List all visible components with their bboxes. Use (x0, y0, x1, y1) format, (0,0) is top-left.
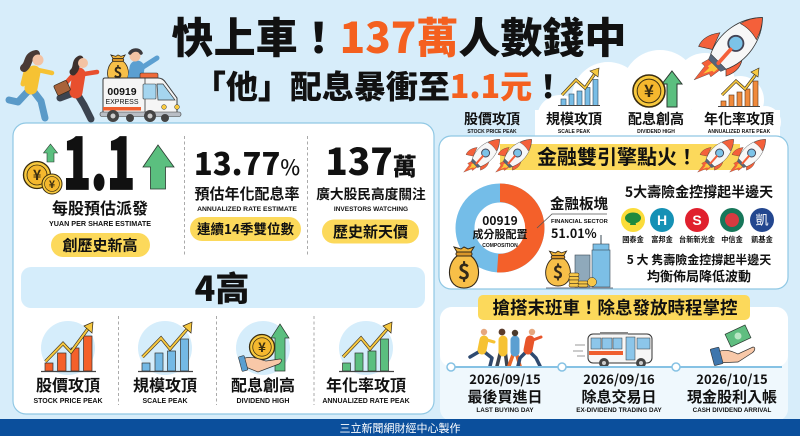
caption english: YUAN PER SHARE ESTIMATE (49, 219, 151, 228)
label english: SCALE PEAK (142, 398, 188, 405)
step: last buying day: 最後買進日 (467, 386, 543, 407)
pill: 創歷史新高 (62, 234, 138, 256)
label: annualized rate peak: 年化率攻頂 (704, 109, 774, 129)
icon: big arrow (143, 145, 174, 189)
logo: Fubon: H (657, 212, 667, 228)
title (172, 5, 626, 108)
icon: small arrow (44, 144, 58, 162)
caption: 預估年化配息率 (194, 183, 300, 204)
caption: 廣大股民高度關注 (316, 183, 426, 203)
label english: ANNUALIZED RATE PEAK (322, 398, 410, 405)
financial sector callout: FINANCIAL SECTOR (551, 219, 609, 225)
van: EXPRESS (105, 99, 139, 106)
van (100, 73, 181, 122)
step: last buying day: 2026/09/15 (469, 369, 541, 388)
logos row (621, 208, 774, 245)
step: ex-dividend trading day: EX-DIVIDEND TRADING DAY (576, 407, 663, 414)
step: last buying day (467, 369, 543, 414)
donut centre label: 00919 (482, 212, 518, 229)
heading: five insurers: 5大壽險金控撐起半邊天 (625, 182, 773, 202)
label: stock price peak: 股價攻頂 (464, 109, 520, 129)
step: cash dividend arrival: CASH DIVIDEND ARRIVAL (693, 407, 772, 414)
panel: financial sector (439, 136, 788, 289)
label: 年化率攻頂 (326, 372, 406, 396)
metric: yuan per share (24, 109, 174, 257)
value 1.1: 1.1 (63, 109, 135, 210)
pill (51, 233, 150, 257)
step: ex-dividend trading day: 2026/09/16 (583, 369, 655, 388)
runner two (53, 58, 97, 119)
financial sector callout: 金融板塊 (550, 193, 608, 214)
donut centre label (472, 212, 528, 249)
logo: KGI: 凱基金 (751, 235, 774, 245)
passenger pointing (130, 50, 157, 80)
van label: 00919 (107, 86, 137, 98)
panel: key figures and four highs (13, 109, 434, 414)
label english: DIVIDEND HIGH (237, 398, 289, 405)
icon: large rocket (694, 18, 762, 80)
step: ex-dividend trading day: 除息交易日 (581, 386, 657, 407)
icons: small rockets (464, 139, 766, 172)
heading band: 4高 (21, 262, 425, 311)
logo: KGI (750, 208, 774, 245)
runner one (9, 54, 52, 118)
label: dividend high: 配息創高 (628, 109, 684, 129)
financial sector callout (537, 193, 609, 242)
text: balance line: 均衡佈局降低波動 (647, 266, 751, 285)
title line 2: 「他」配息暴衝至1.1元！ (194, 62, 564, 108)
heading band: 4高: 4高 (195, 262, 249, 311)
icon: blue chart (558, 68, 600, 106)
label: dividend high: DIVIDEND HIGH (637, 129, 675, 135)
pill: 歷史新天價 (333, 221, 408, 242)
icon: orange chart (718, 68, 760, 106)
label: 配息創高 (231, 372, 295, 396)
footer bar (0, 419, 800, 436)
step: cash dividend arrival: 現金股利入帳 (687, 386, 777, 407)
step: cash dividend arrival (687, 369, 777, 414)
financial sector callout: 51.01% (551, 223, 597, 242)
caption english: INVESTORS WATCHING (334, 206, 408, 213)
title line 1: 快上車！137萬人數錢中 (172, 5, 626, 66)
value 13.77%: 13.77% (194, 139, 300, 184)
metric: investors (316, 132, 426, 244)
label: 股價攻頂 (36, 372, 100, 396)
label: scale peak: SCALE PEAK (558, 129, 590, 135)
icon: bus (573, 332, 652, 368)
logo: CTBC: 中信金 (721, 235, 744, 245)
logo: Cathay: 國泰金 (622, 235, 645, 245)
money bag on van (108, 55, 128, 84)
item: annualized rate peak (322, 321, 410, 405)
donut chart: composition (465, 184, 544, 272)
icon: hand with cash (710, 325, 755, 366)
label: scale peak: 規模攻頂 (546, 109, 602, 129)
logo: Taishin Shin Kong (679, 208, 716, 245)
label: stock price peak: STOCK PRICE PEAK (467, 129, 517, 135)
step: ex-dividend trading day (576, 369, 663, 414)
donut centre label: 成分股配置 (472, 226, 528, 242)
illustration: runners and express van (9, 50, 181, 122)
heading banner (500, 141, 740, 170)
label english: STOCK PRICE PEAK (33, 398, 103, 405)
heading banner: 金融雙引擎點火！ (537, 141, 697, 170)
logo: Taishin Shin Kong: S (692, 212, 702, 228)
step: last buying day: LAST BUYING DAY (476, 407, 534, 414)
item: dividend high (231, 321, 295, 405)
peak labels row (464, 68, 774, 135)
label: annualized rate peak: ANNUALIZED RATE PEAK (708, 129, 771, 135)
logo: CTBC (720, 208, 744, 245)
icon: coin and green arrow (633, 71, 682, 107)
icon: money bag left (449, 247, 479, 288)
donut centre label: COMPOSITION (482, 243, 518, 249)
logo: Fubon: 富邦金 (651, 235, 674, 245)
footer bar: 三立新聞網財經中心製作 (340, 420, 460, 436)
item: scale peak (133, 321, 197, 405)
caption: 每股預估派發 (52, 195, 148, 219)
metric: annualized rate (190, 139, 301, 241)
label: 規模攻頂 (133, 372, 197, 396)
value 137萬: 137萬 (325, 132, 417, 186)
cloud behind top-right labels (535, 50, 781, 145)
logo: Cathay (621, 208, 645, 245)
logo: Taishin Shin Kong: 台新新光金 (679, 235, 716, 245)
logo: Fubon (650, 208, 674, 245)
text: insurers line: 5 大 隽壽險金控撐起半邊天 (627, 251, 771, 268)
pill: 連續14季雙位數 (197, 218, 294, 238)
panel: timeline (440, 295, 788, 421)
item: stock price peak (33, 321, 103, 405)
icon: coins (24, 162, 62, 194)
timeline line and dots (447, 363, 782, 371)
logo: KGI: 凱 (755, 210, 769, 228)
heading banner: 搶搭末班車！除息發放時程掌控 (492, 295, 738, 320)
icon: running crowd (470, 329, 541, 366)
step: cash dividend arrival: 2026/10/15 (696, 369, 768, 388)
icon: bag, coins and buildings (546, 235, 613, 288)
caption english: ANNUALIZED RATE ESTIMATE (197, 206, 297, 213)
